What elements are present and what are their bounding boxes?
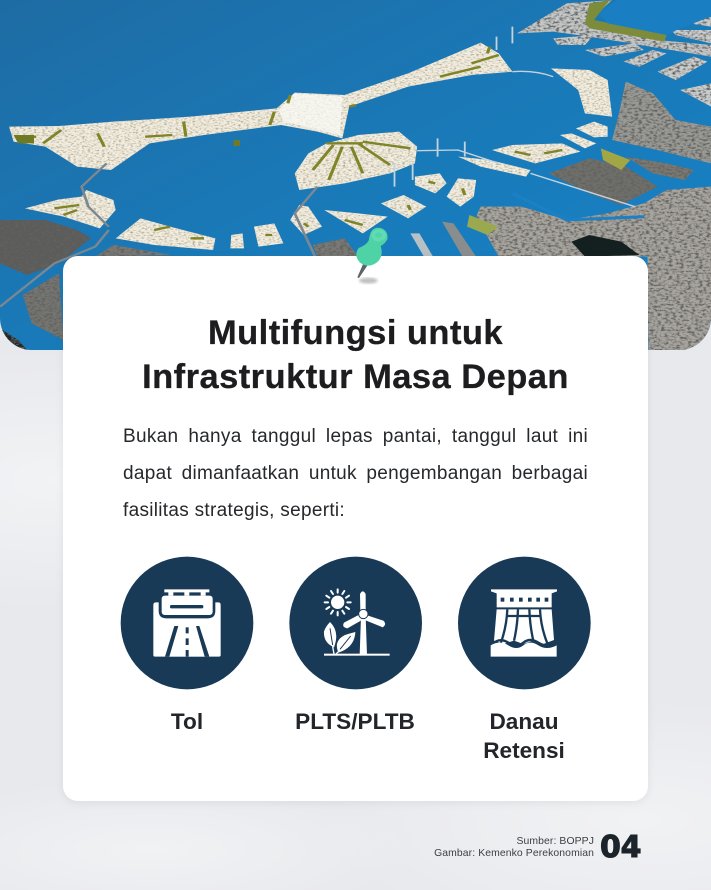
grey city areas bbox=[0, 0, 711, 350]
blue channels in the city bbox=[512, 193, 644, 220]
icon: solar and wind energy bbox=[289, 557, 422, 689]
label: Tol: Tol bbox=[171, 709, 203, 734]
label: Danau Retensi: Danau bbox=[489, 709, 559, 734]
source credit: Gambar: Kemenko Perekonomian bbox=[434, 848, 594, 859]
intro text block: dapat dimanfaatkan untuk pengembangan berbagai bbox=[123, 462, 588, 484]
olive green strips bbox=[18, 47, 562, 238]
bridges bbox=[394, 27, 635, 207]
label: PLTS/PLTB: PLTS/PLTB bbox=[295, 709, 415, 734]
aerial photo of the giant sea wall plan bbox=[0, 0, 711, 350]
intro text block: fasilitas strategis, seperti: bbox=[123, 500, 345, 520]
label: Danau Retensi: Retensi bbox=[483, 738, 565, 763]
icon: toll road gate bbox=[121, 557, 253, 689]
label: Danau Retensi bbox=[483, 709, 565, 763]
icon row bbox=[120, 556, 591, 690]
title: Multifungsi untuk bbox=[208, 314, 503, 352]
title: Infrastruktur Masa Depan bbox=[142, 358, 569, 396]
white central towers bbox=[279, 93, 342, 135]
icon: green push pin bbox=[356, 228, 388, 284]
panel: white content card bbox=[63, 256, 648, 801]
dark inlet bbox=[571, 235, 639, 257]
intro text block bbox=[123, 426, 588, 520]
intro text block: Bukan hanya tanggul lepas pantai, tanggul laut ini bbox=[123, 426, 588, 446]
source credit: Sumber: BOPPJ bbox=[516, 836, 594, 847]
background ripple pattern bbox=[0, 340, 711, 890]
title bbox=[142, 314, 569, 396]
sea wall main island bbox=[9, 43, 612, 250]
icon: retention dam bbox=[458, 557, 591, 689]
page number: 04 bbox=[600, 830, 641, 865]
source credit bbox=[434, 836, 594, 859]
